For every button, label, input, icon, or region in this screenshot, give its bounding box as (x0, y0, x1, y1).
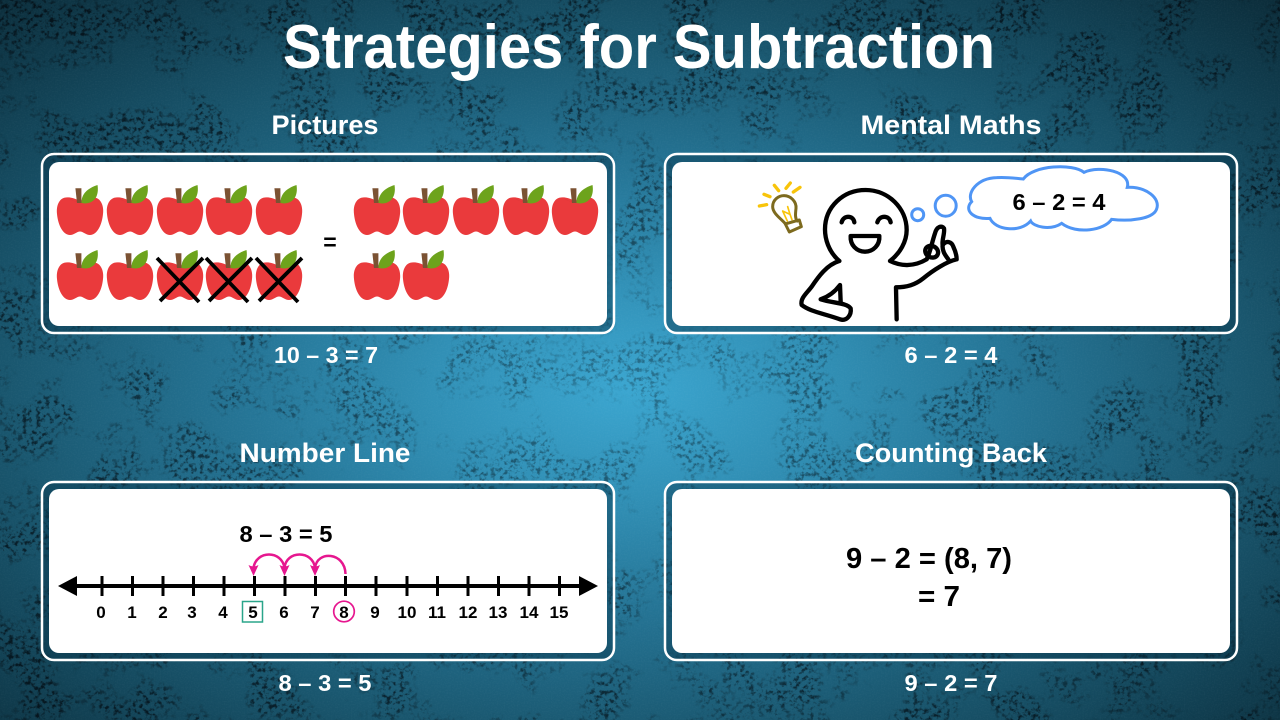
number labels: 10 (398, 603, 416, 622)
panel: pictures (42, 110, 614, 368)
title: Strategies for Subtraction (283, 13, 995, 82)
number labels: 13 (489, 603, 507, 622)
number labels: 14 (520, 603, 539, 622)
caption: number line: 8 – 3 = 5 (278, 670, 372, 696)
heading: number line: Number Line (240, 438, 410, 468)
panel frame: mental maths (665, 154, 1237, 333)
number labels: 5 (248, 603, 258, 622)
equals sign: = (323, 229, 337, 255)
panel: number line (42, 438, 614, 696)
caption: counting back: 9 – 2 = 7 (904, 670, 998, 696)
number labels: 12 (459, 603, 477, 622)
number labels: 8 (339, 603, 349, 622)
panel frame: counting back (665, 482, 1237, 660)
panel frame: pictures (42, 154, 614, 333)
number labels: 4 (218, 603, 228, 622)
number labels: 2 (158, 603, 168, 622)
working: counting back: = 7 (918, 581, 960, 613)
number labels: 1 (127, 603, 137, 622)
panel: counting back (665, 438, 1237, 696)
number labels: 3 (187, 603, 197, 622)
number labels: 9 (370, 603, 380, 622)
apples: remaining seven (354, 185, 598, 300)
number labels: 0 (96, 603, 106, 622)
highlight: start 8 in circle (334, 601, 354, 622)
working: counting back (846, 543, 1012, 613)
jump arrows (248, 554, 346, 576)
highlight: answer 5 in box (242, 602, 262, 622)
number line axis with ticks (58, 576, 598, 596)
thought bubbles (912, 195, 956, 221)
icon: light bulb (759, 183, 801, 232)
thought cloud with equation: 6 – 2 = 4 (1012, 189, 1106, 215)
apples: first group of ten with three crossed out (57, 185, 302, 302)
panel: mental maths (665, 110, 1237, 368)
number labels: 15 (550, 603, 568, 622)
caption: mental maths: 6 – 2 = 4 (904, 342, 998, 368)
heading: counting back: Counting Back (855, 438, 1048, 468)
caption: pictures: 10 – 3 = 7 (274, 342, 378, 368)
number labels: 11 (428, 603, 446, 622)
heading: pictures: Pictures (272, 110, 378, 140)
working: counting back: 9 – 2 = (8, 7) (846, 543, 1012, 575)
number labels (96, 603, 568, 622)
heading: mental maths: Mental Maths (860, 110, 1042, 140)
thought cloud with equation (969, 167, 1157, 230)
number labels: 6 (279, 603, 289, 622)
character: smiling figure pointing up (801, 190, 957, 320)
equation: number line: 8 – 3 = 5 (240, 521, 333, 547)
number labels: 7 (310, 603, 320, 622)
panel frame: number line (42, 482, 614, 660)
